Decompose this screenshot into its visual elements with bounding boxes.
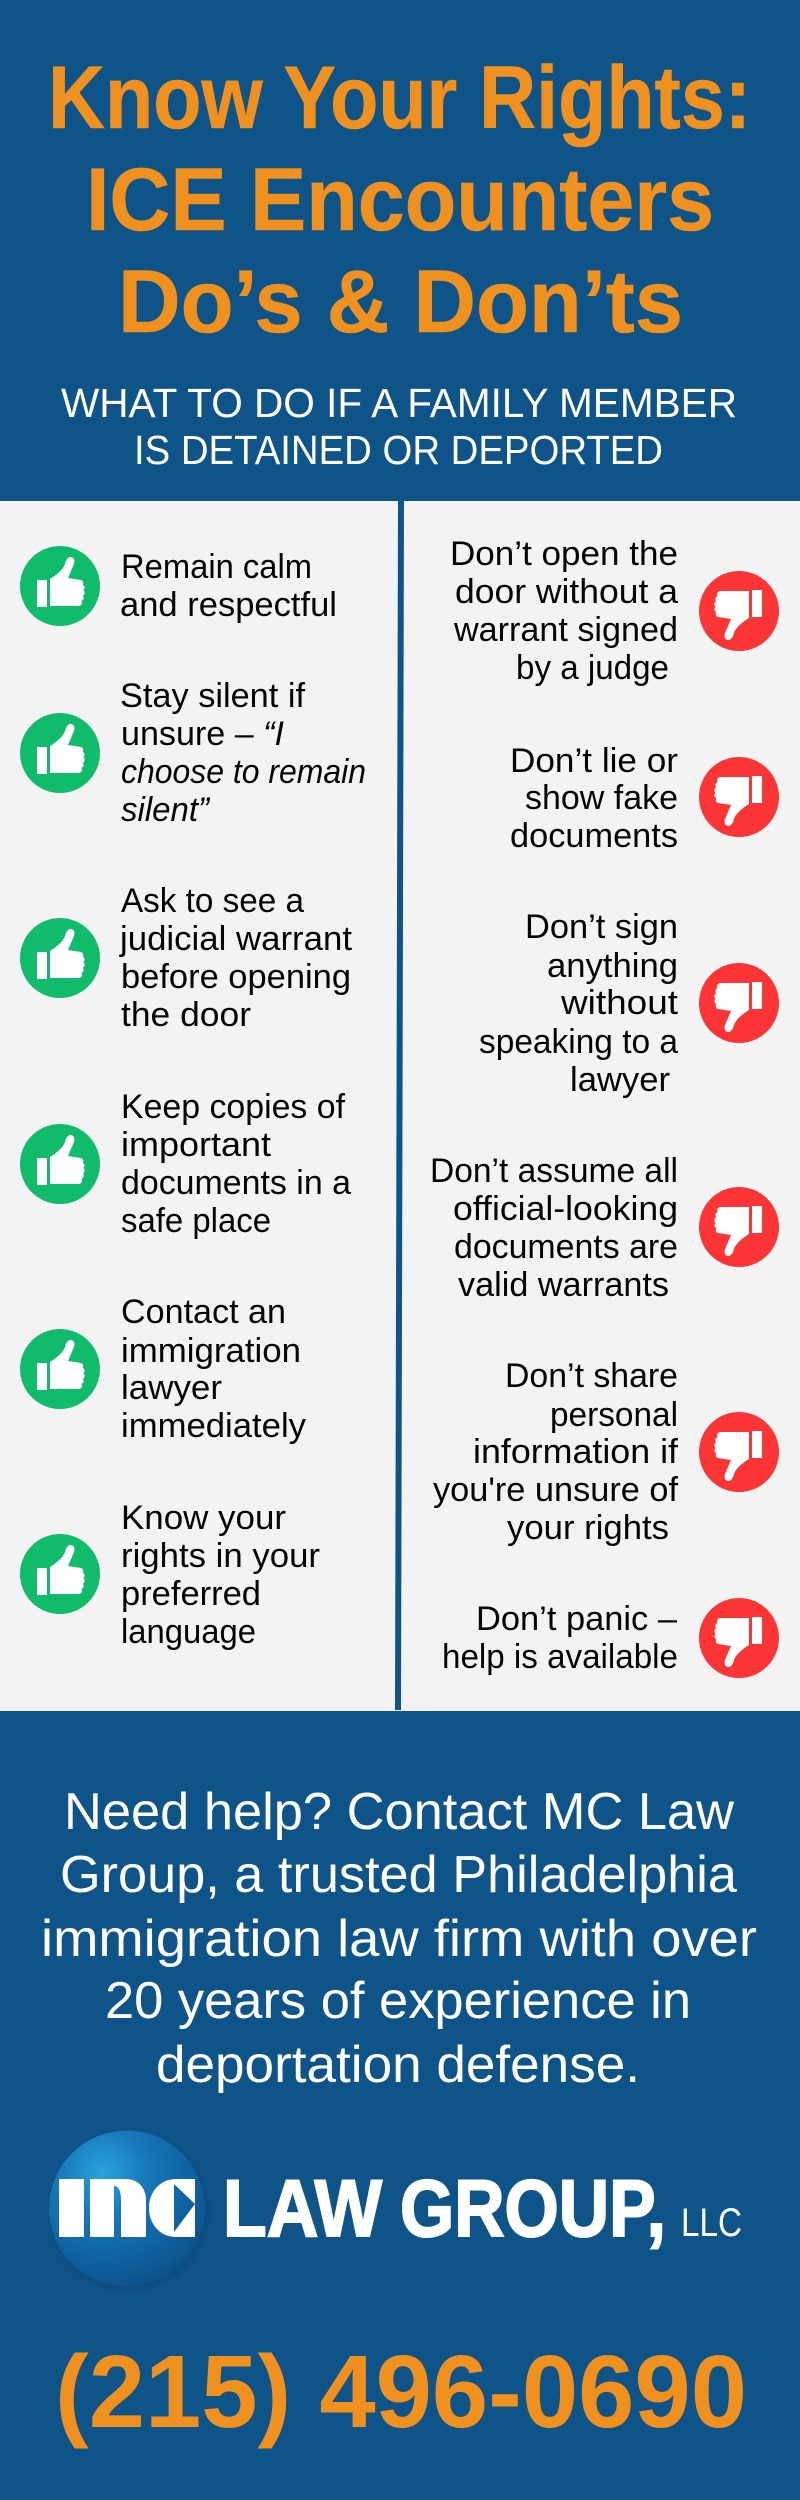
do: stay silent: unsure – “I — [121, 715, 285, 753]
call to action text: 20 years of experience in — [105, 1972, 691, 2030]
title — [48, 47, 751, 351]
do: keep copies: documents in a — [121, 1164, 351, 1202]
do: contact lawyer: lawyer — [121, 1369, 222, 1407]
do: stay silent: choose to remain — [121, 753, 366, 791]
don't: open the door: by a judge — [516, 649, 669, 687]
do: keep copies: Keep copies of — [121, 1088, 346, 1126]
logo mark: mc — [59, 2179, 195, 2237]
do: stay silent: silent” — [121, 791, 211, 829]
don't: sign: speaking to a — [479, 1023, 678, 1061]
don't: lie: documents — [510, 817, 678, 855]
subtitle: WHAT TO DO IF A FAMILY MEMBER — [61, 380, 737, 426]
don't: assume: valid warrants — [458, 1266, 669, 1304]
title: ICE Encounters — [86, 149, 714, 249]
do: ask for warrant: judicial warrant — [119, 920, 353, 958]
don't: open the door — [450, 535, 779, 687]
do: remain calm — [20, 546, 337, 626]
logo sphere — [49, 2130, 207, 2289]
do: ask for warrant: before opening — [121, 958, 351, 996]
do: contact lawyer — [20, 1293, 306, 1445]
don't: sign: Don’t sign — [525, 908, 678, 946]
do: keep copies: important — [121, 1126, 272, 1164]
don't: sign: lawyer — [570, 1061, 670, 1099]
logo wordmark: LAW — [223, 2164, 382, 2254]
don't: share: personal — [550, 1396, 678, 1434]
center divider — [395, 501, 404, 1710]
do: know your rights: language — [121, 1613, 256, 1651]
don't: open the door: warrant signed — [453, 611, 678, 649]
don't: share — [433, 1357, 779, 1547]
logo wordmark: LLC — [681, 2201, 742, 2245]
call to action text: immigration law firm with over — [41, 1910, 757, 1968]
do: keep copies — [20, 1088, 351, 1240]
don't: lie: Don’t lie or — [510, 742, 678, 780]
do: know your rights: preferred — [121, 1575, 261, 1613]
do: know your rights — [20, 1499, 320, 1651]
subtitle — [61, 380, 737, 473]
subtitle: IS DETAINED OR DEPORTED — [134, 427, 663, 473]
don't: assume: documents are — [454, 1228, 678, 1266]
panel: do's and don'ts — [0, 501, 800, 1711]
don't: lie — [510, 742, 779, 855]
do: contact lawyer: immediately — [121, 1407, 306, 1445]
do: stay silent — [20, 677, 366, 829]
do: stay silent: Stay silent if — [120, 677, 306, 715]
don't: panic: Don’t panic – — [476, 1600, 677, 1638]
call to action text: Group, a trusted Philadelphia — [60, 1846, 737, 1904]
don't: sign: without — [560, 984, 679, 1022]
do: know your rights: Know your — [121, 1499, 286, 1537]
don't: assume — [430, 1152, 779, 1304]
do: contact lawyer: immigration — [121, 1332, 301, 1370]
don't: lie: show fake — [525, 779, 678, 817]
don't: panic: help is available — [442, 1638, 678, 1676]
do: ask for warrant — [20, 882, 353, 1034]
phone number: (215) 496-0690 — [55, 2334, 747, 2449]
do: ask for warrant: the door — [121, 996, 251, 1034]
don't: share: you're unsure of — [433, 1471, 679, 1509]
call to action text: Need help? Contact MC Law — [64, 1783, 734, 1841]
do: remain calm: and respectful — [120, 586, 337, 624]
do: keep copies: safe place — [121, 1202, 271, 1240]
do: remain calm: Remain calm — [121, 548, 312, 586]
don't: assume: Don’t assume all — [430, 1152, 678, 1190]
don't: sign: anything — [547, 947, 678, 985]
don't: panic — [442, 1598, 779, 1678]
don't: open the door: Don’t open the — [450, 535, 678, 573]
don't: assume: official-looking — [453, 1190, 678, 1228]
call to action text — [41, 1783, 757, 2094]
don't: sign — [479, 908, 779, 1099]
title: Do’s & Don’ts — [118, 251, 683, 351]
don't: open the door: door without a — [455, 573, 678, 611]
logo wordmark: GROUP, — [400, 2164, 666, 2254]
call to action text: deportation defense. — [156, 2036, 640, 2094]
don't: share: Don’t share — [505, 1357, 678, 1395]
logo wordmark — [223, 2164, 742, 2254]
logo: MC Law Group — [49, 2130, 742, 2289]
don't: share: information if — [473, 1433, 679, 1471]
do: ask for warrant: Ask to see a — [121, 882, 304, 920]
do: know your rights: rights in your — [121, 1537, 320, 1575]
do: contact lawyer: Contact an — [121, 1293, 286, 1331]
don't: share: your rights — [507, 1509, 669, 1547]
